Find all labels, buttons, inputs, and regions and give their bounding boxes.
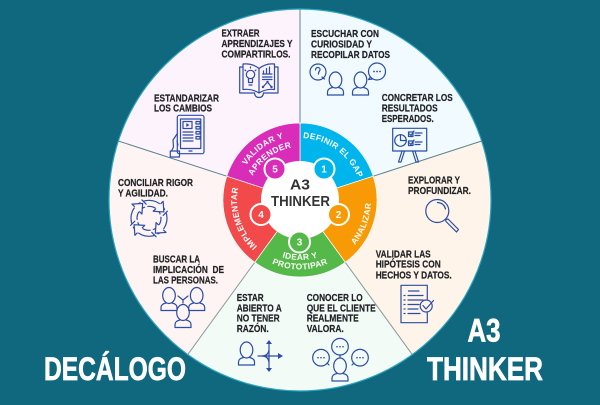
text: conocer al cliente: CONOCER LO bbox=[307, 293, 363, 304]
segment 1: definir el gap: DEFINIR EL GAP bbox=[304, 132, 363, 176]
panel: definir el gap bbox=[300, 9, 482, 200]
text: estar abierto: ABIERTO A bbox=[237, 303, 282, 314]
icon: checklist document bbox=[401, 285, 434, 323]
title: a3 thinker bbox=[427, 313, 543, 387]
text: escuchar: RECOPILAR DATOS bbox=[311, 50, 390, 61]
icon: magnifier bbox=[426, 200, 458, 232]
segment 5: validar y aprender: APRENDER bbox=[248, 142, 292, 176]
title: decálogo: DECÁLOGO bbox=[44, 351, 186, 387]
text: buscar implicación bbox=[153, 255, 224, 287]
badge 3: 3 bbox=[297, 238, 303, 249]
icon: presentation board bbox=[393, 128, 427, 162]
text: estar abierto bbox=[237, 293, 282, 335]
text: concretar bbox=[382, 93, 453, 125]
segment 5: validar y aprender: VALIDAR Y bbox=[242, 132, 282, 164]
text: conciliar: Y AGILIDAD. bbox=[118, 188, 168, 199]
text: buscar implicación: BUSCAR LA bbox=[153, 255, 200, 266]
panel: analizar bbox=[300, 141, 491, 355]
panel: idear y prototipar bbox=[188, 200, 412, 391]
text: extraer aprendizajes: EXTRAER bbox=[222, 29, 260, 40]
badge 2 bbox=[328, 204, 349, 225]
text: estar abierto: NO TENER bbox=[237, 314, 280, 325]
badge 5: 5 bbox=[272, 165, 278, 176]
badge 1 bbox=[314, 158, 334, 180]
text: conocer al cliente bbox=[307, 293, 376, 335]
text: concretar: RESULTADOS bbox=[382, 104, 438, 115]
title: a3 thinker: THINKER bbox=[427, 351, 543, 387]
text: concretar: ESPERADOS. bbox=[382, 114, 434, 125]
text: explorar: EXPLORAR Y bbox=[408, 176, 460, 187]
text: estar abierto: RAZÓN. bbox=[237, 323, 269, 335]
icon: person with arrows bbox=[238, 340, 283, 372]
segment 4: implementar: IMPLEMENTAR bbox=[231, 188, 257, 250]
text: estandarizar: LOS CAMBIOS bbox=[154, 104, 212, 115]
text: extraer aprendizajes bbox=[222, 29, 293, 60]
segment 3: idear y prototipar: IDEAR Y bbox=[282, 252, 316, 260]
text: extraer aprendizajes: COMPARTIRLOS. bbox=[222, 49, 291, 60]
wheel outline bbox=[109, 9, 491, 391]
segment 3: idear y prototipar bbox=[254, 231, 346, 278]
panel: validar y aprender bbox=[118, 9, 300, 200]
text: conciliar: CONCILIAR RIGOR bbox=[118, 178, 193, 189]
icon: cycle arrows bbox=[128, 197, 170, 240]
outer wheel bbox=[109, 9, 491, 391]
text: extraer aprendizajes: APRENDIZAJES Y bbox=[222, 39, 293, 50]
segment 2: analizar: ANALIZAR bbox=[352, 204, 371, 245]
icon: tablet in hand bbox=[170, 115, 204, 157]
icon: person with speech bubbles bbox=[313, 338, 368, 381]
text: explorar bbox=[408, 176, 471, 197]
segment 3: idear y prototipar: PROTOTIPAR bbox=[272, 258, 328, 270]
central ring bbox=[222, 122, 378, 278]
text: estar abierto: ESTAR bbox=[237, 293, 264, 304]
text: conciliar bbox=[118, 178, 193, 199]
text: explorar: PROFUNDIZAR. bbox=[408, 186, 471, 197]
text: concretar: CONCRETAR LOS bbox=[382, 93, 453, 104]
text: estandarizar bbox=[154, 94, 219, 115]
text: escuchar: ESCUCHAR CON bbox=[311, 29, 379, 40]
badge 5 bbox=[264, 158, 286, 180]
centre circle bbox=[261, 161, 339, 239]
icon: group of three people bbox=[161, 288, 205, 328]
text: validar hipótesis: HECHOS Y DATOS. bbox=[376, 270, 452, 281]
segment 4: implementar bbox=[222, 176, 278, 263]
icon: two people talking bbox=[310, 63, 386, 95]
text: buscar implicación: IMPLICACIÓN DE bbox=[153, 264, 224, 276]
text: estandarizar: ESTANDARIZAR bbox=[154, 94, 219, 105]
centre title: A3 bbox=[290, 177, 310, 193]
text: escuchar bbox=[311, 29, 390, 61]
text: conocer al cliente: VALORA. bbox=[307, 324, 344, 335]
badge 3 bbox=[289, 232, 310, 252]
badge 4: 4 bbox=[258, 210, 264, 221]
segment 1: definir el gap bbox=[300, 122, 374, 188]
title: a3 thinker: A3 bbox=[468, 313, 500, 349]
badge 2: 2 bbox=[336, 210, 342, 221]
text: validar hipótesis bbox=[376, 249, 452, 281]
icon: open book bbox=[240, 64, 278, 98]
text: validar hipótesis: HIPÓTESIS CON bbox=[376, 259, 441, 271]
segment 2: analizar bbox=[323, 176, 378, 263]
text: buscar implicación: LAS PERSONAS. bbox=[153, 276, 218, 287]
centre title bbox=[271, 177, 330, 210]
badge 1: 1 bbox=[321, 165, 327, 176]
segment 5: validar y aprender bbox=[226, 122, 300, 188]
text: validar hipótesis: VALIDAR LAS bbox=[376, 249, 431, 260]
text: conocer al cliente: QUE EL CLIENTE bbox=[307, 303, 376, 314]
text: conocer al cliente: REALMENTE bbox=[307, 314, 359, 325]
panel: implementar bbox=[109, 141, 300, 355]
badge 4 bbox=[250, 204, 272, 225]
text: escuchar: CURIOSIDAD Y bbox=[311, 40, 372, 51]
centre title: THINKER bbox=[271, 194, 330, 210]
